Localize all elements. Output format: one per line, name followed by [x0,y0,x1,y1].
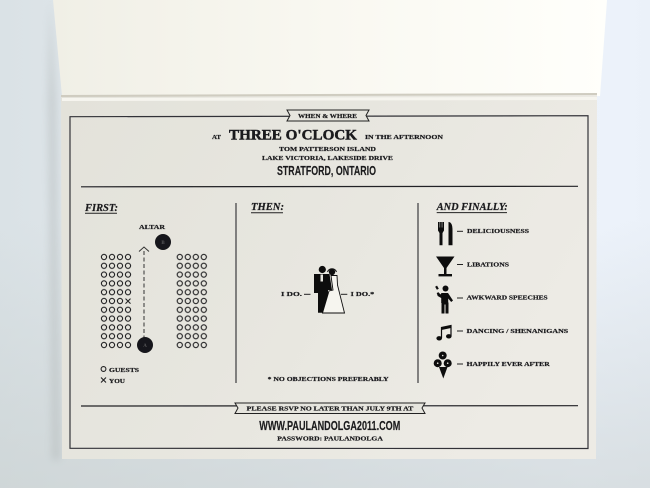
seating block: left [100,253,132,349]
heading ribbon: when and where: WHEN & WHERE [298,113,357,120]
column divider left [235,203,237,383]
label: bride i do: I DO.* [351,291,374,298]
item: awkward speeches: AWKWARD SPEECHES [467,295,548,302]
panel: and finally [434,201,569,378]
icon: martini glass [436,256,454,276]
time and location block [212,128,443,178]
icon: music notes [436,326,452,340]
marker: a at entrance [137,337,153,353]
time and location block: TOM PATTERSON ISLAND [279,146,376,153]
panel: then [251,201,389,383]
password line: PASSWORD: PAULANDOLGA [277,436,383,442]
label: groom i do: I DO. [281,291,303,298]
item: happily ever after: HAPPILY EVER AFTER [467,361,550,368]
legend: guests and you: GUESTS [109,367,139,374]
marker: b at altar: B [161,241,165,246]
website url: WWW.PAULANDOLGA2011.COM [259,418,400,433]
item: libations [457,262,509,268]
time and location block: STRATFORD, ONTARIO [277,163,376,178]
panel: first [84,202,208,385]
lower divider rule [81,405,578,407]
legend: guests and you: YOU [109,378,125,385]
item: libations: LIBATIONS [467,262,509,268]
rsvp ribbon: PLEASE RSVP NO LATER THAN JULY 9TH AT [247,406,414,412]
time and location block: LAKE VICTORIA, LAKESIDE DRIVE [262,155,393,162]
time and location block: THREE O'CLOCK [229,128,358,144]
top flap of card [53,0,607,96]
outer frame [70,116,588,448]
marker: b at altar [155,234,171,250]
item: dancing and shenanigans: DANCING / SHENANIGANS [467,328,569,335]
heading: and finally: AND FINALLY: [436,201,508,213]
label: altar: ALTAR [139,224,165,231]
marker: a at entrance: A [143,344,147,349]
rsvp ribbon [235,403,425,414]
label: bride i do [341,291,374,298]
icon: person giving speech [435,286,453,314]
upper divider rule [81,185,578,188]
icon: bouquet [434,352,452,378]
seating block: right [176,253,208,349]
heading: first: FIRST: [84,202,118,214]
column divider right [417,203,419,383]
time and location block: AT [212,134,222,141]
legend: guests and you [101,367,139,385]
footnote: * NO OBJECTIONS PREFERABLY [268,376,389,383]
heading: then: THEN: [251,201,284,213]
icon: fork and knife [438,222,452,245]
heading ribbon: when and where [287,110,369,121]
label: groom i do [281,291,310,298]
lower card panel [61,93,597,459]
item: deliciousness: DELICIOUSNESS [467,228,529,235]
time and location block: IN THE AFTERNOON [365,134,443,141]
icon: bride and groom [314,266,344,313]
dashed aisle arrow [139,247,149,338]
